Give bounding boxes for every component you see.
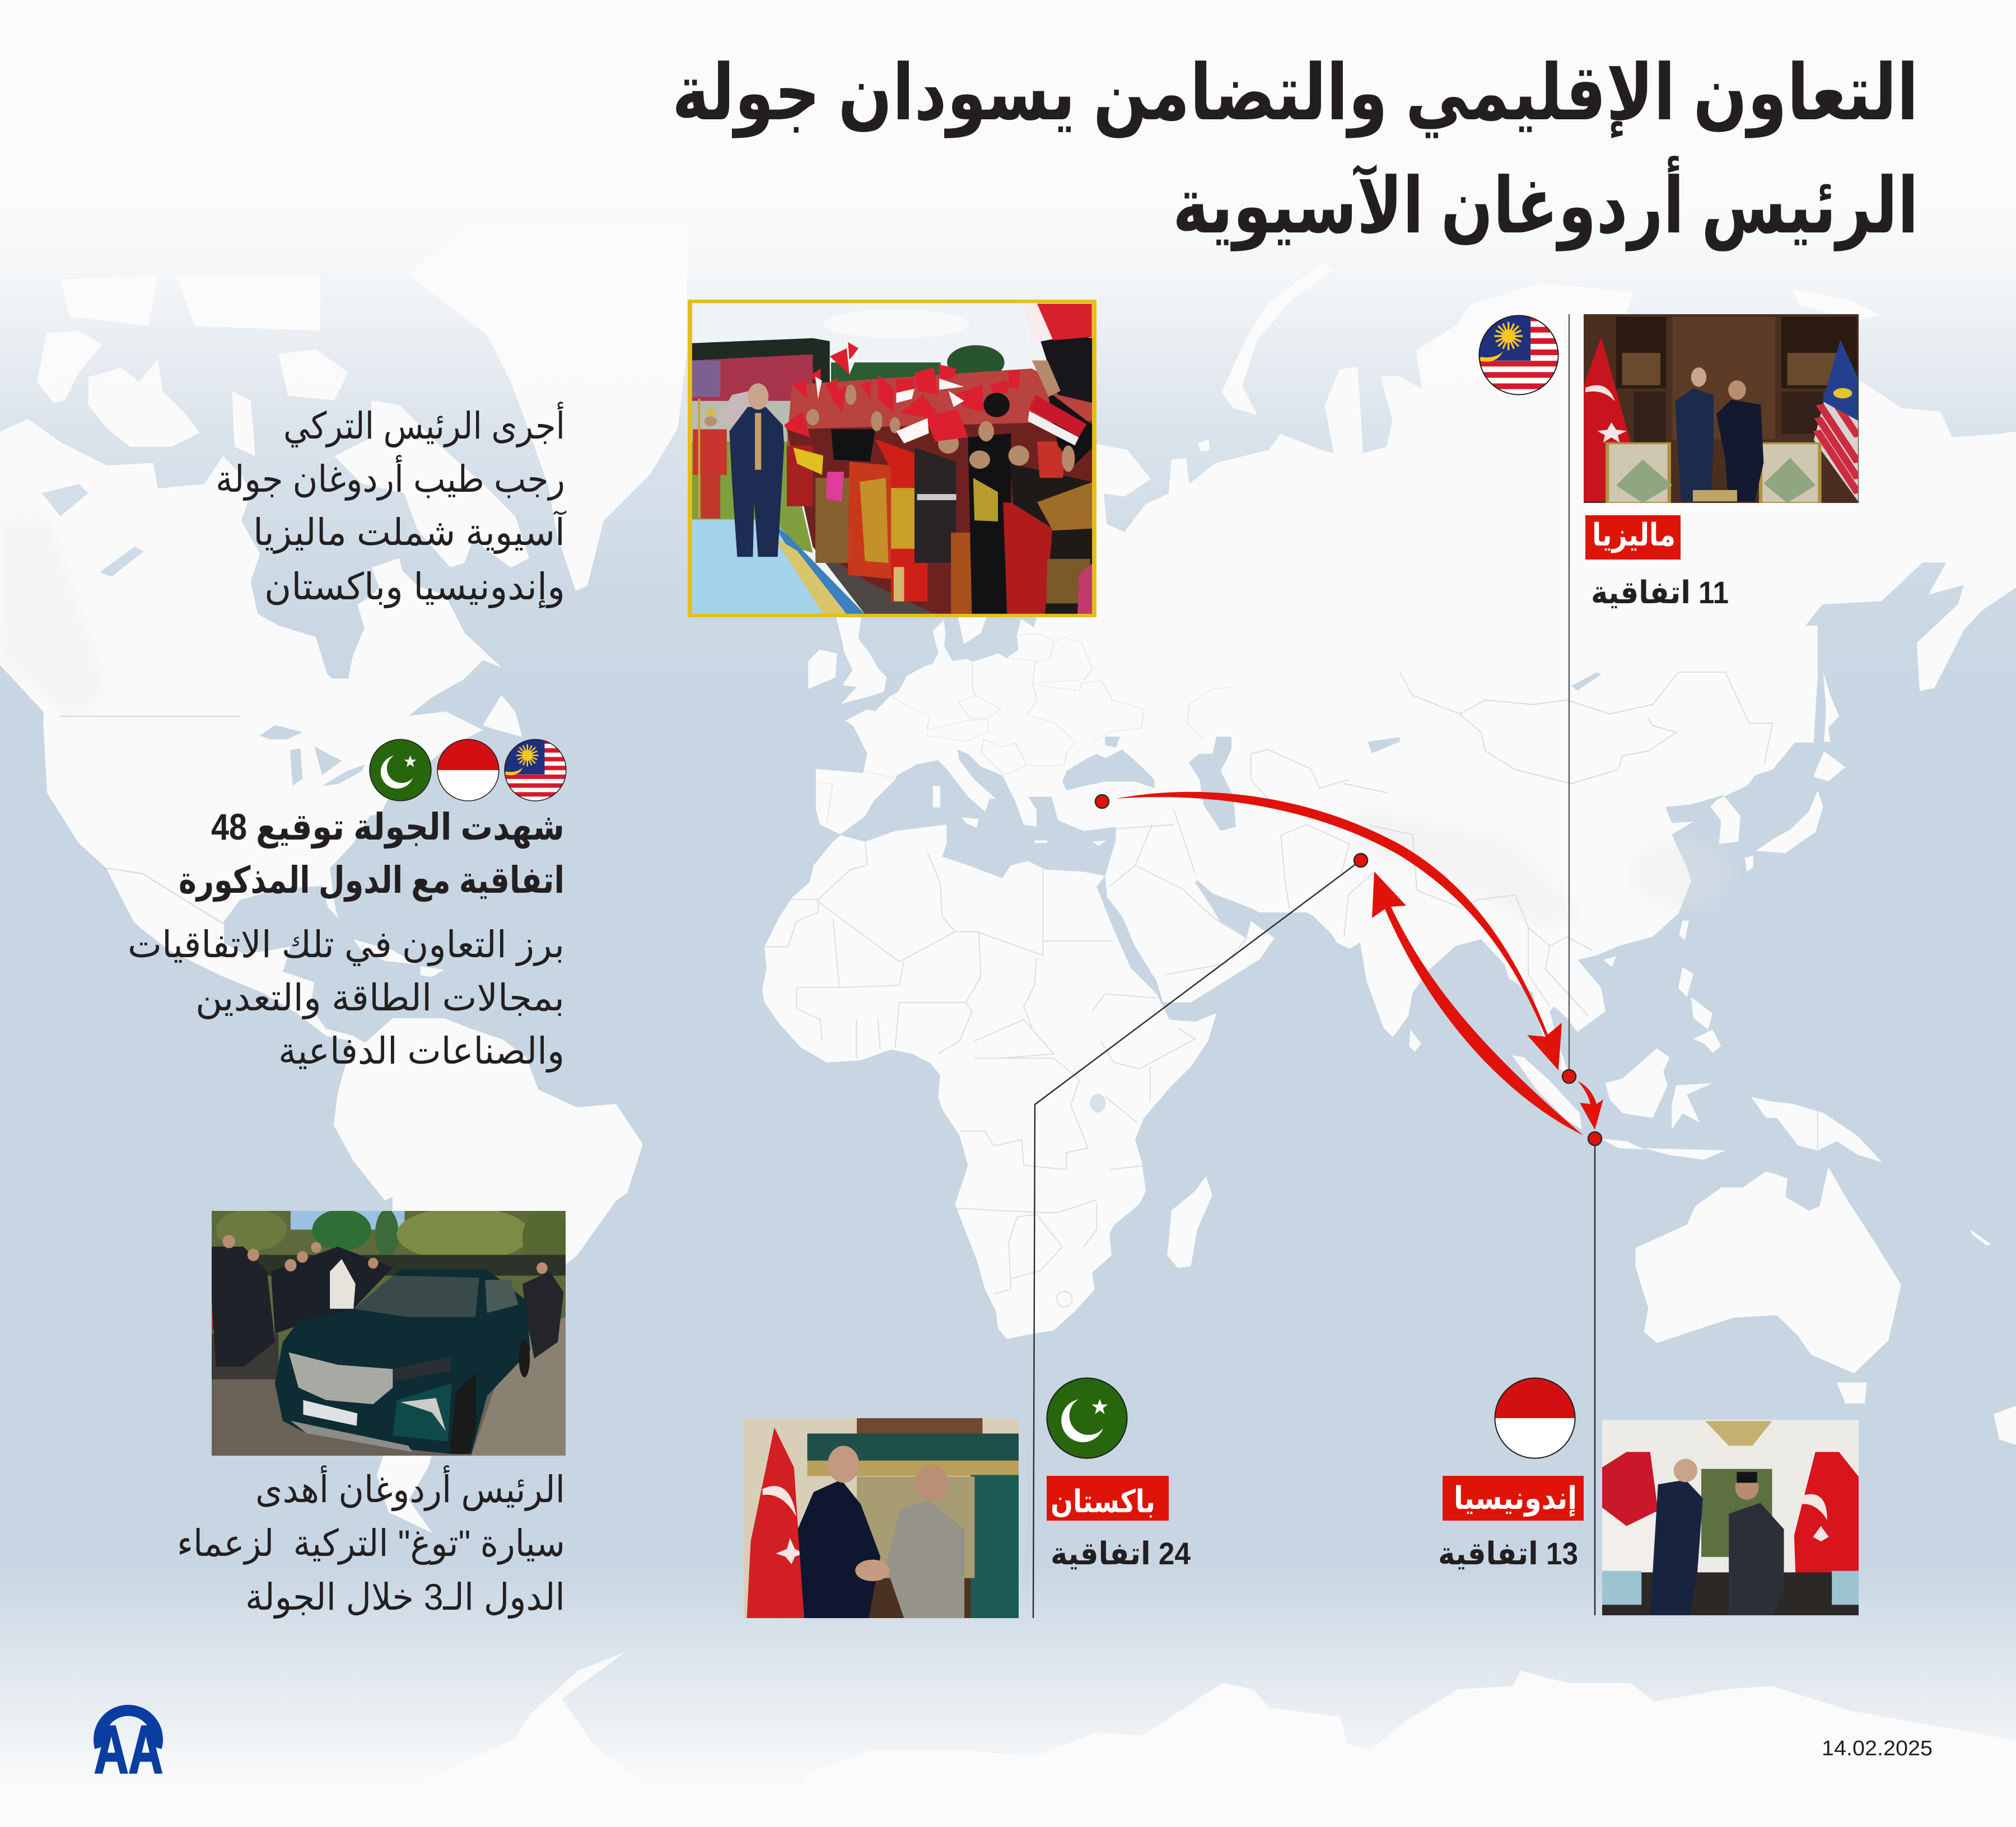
connector lines <box>1033 314 1595 1618</box>
land: USA, Mexico, Central America <box>43 679 444 1043</box>
logo: Anadolu Agency: AA <box>94 1711 163 1787</box>
land: Antarctica <box>358 1652 2016 1827</box>
land: Northern Europe <box>808 607 1232 772</box>
text block: Togg gift <box>177 1465 565 1619</box>
terrain shading <box>0 515 1730 924</box>
text block: cooperation fields: بمجالات الطاقة والتعدين <box>195 977 564 1019</box>
text block: cooperation fields: برز التعاون في تلك الاتفاقيات <box>128 924 564 966</box>
title <box>672 50 1919 251</box>
label: Indonesia <box>1443 1476 1584 1521</box>
text block: Togg gift: سيارة "توغ" التركية لزعماء <box>177 1522 565 1565</box>
text block: 48 agreements: شهدت الجولة توقيع 48 <box>211 806 564 849</box>
land: New Zealand <box>1994 1406 2016 1445</box>
icon: three country flags <box>370 739 566 801</box>
land: Southern Europe, Middle East and India west <box>816 707 1400 1037</box>
text block: Togg gift: الدول الـ3 خلال الجولة <box>245 1576 565 1619</box>
text block: tour introduction: رجب طيب أردوغان جولة <box>216 455 565 501</box>
photo: Pakistan meeting <box>744 1418 1019 1618</box>
photo: Malaysia meeting <box>1584 314 1859 503</box>
land: Africa <box>762 824 1216 1339</box>
panel: Indonesia <box>1438 1378 1859 1615</box>
land: East and South East Asia, Oceania <box>1301 626 1991 1404</box>
land: Russia and Siberia <box>1080 264 2016 743</box>
photo: Togg car <box>212 1211 566 1456</box>
panel: Malaysia <box>1479 314 1859 610</box>
text block: tour introduction: أجرى الرئيس التركي <box>283 402 565 448</box>
photo: Indonesia meeting <box>1602 1420 1859 1615</box>
value: 13 agreements: 13 اتفاقية <box>1438 1536 1578 1571</box>
value: 24 agreements: 24 اتفاقية <box>1051 1536 1191 1571</box>
text block: Togg gift: الرئيس أردوغان أهدى <box>255 1465 565 1511</box>
text block: tour introduction: آسيوية شملت ماليزيا <box>253 510 567 554</box>
text block: tour introduction <box>216 402 567 609</box>
inland seas and lakes <box>42 484 1601 1112</box>
land: Canada and Greenland <box>0 224 687 846</box>
text block: 48 agreements <box>179 806 564 902</box>
arrow: Malaysia to Indonesia <box>1578 1081 1603 1130</box>
icon: Pakistan flag <box>1047 1378 1127 1458</box>
label: Malaysia <box>1585 515 1681 560</box>
arrow: Turkey to Malaysia <box>1116 792 1562 1070</box>
label: Malaysia: ماليزيا <box>1592 517 1676 553</box>
location dots <box>1095 795 1602 1145</box>
date: 14.02.2025 <box>1822 1737 1933 1760</box>
text block: 48 agreements: اتفاقية مع الدول المذكورة <box>179 859 564 902</box>
text block: tour introduction: وإندونيسيا وباكستان <box>264 566 565 609</box>
icon: Indonesia flag <box>1495 1378 1575 1458</box>
text block: cooperation fields <box>128 924 564 1073</box>
value: 11 agreements: 11 اتفاقية <box>1591 575 1729 610</box>
photo: welcome ceremony with yellow frame <box>688 300 1096 617</box>
label: Indonesia: إندونيسيا <box>1454 1480 1577 1517</box>
arrow: Indonesia to Pakistan <box>1372 871 1583 1135</box>
top and bottom fade over the map <box>0 0 2016 706</box>
country borders <box>60 634 1818 1307</box>
logo: Anadolu Agency <box>94 1711 163 1787</box>
icon: Malaysia flag <box>1479 315 1558 395</box>
text block: cooperation fields: والصناعات الدفاعية <box>278 1030 564 1073</box>
land: South America <box>334 1018 643 1533</box>
panel: Pakistan <box>744 1378 1191 1618</box>
label: Pakistan: باكستان <box>1051 1484 1155 1519</box>
